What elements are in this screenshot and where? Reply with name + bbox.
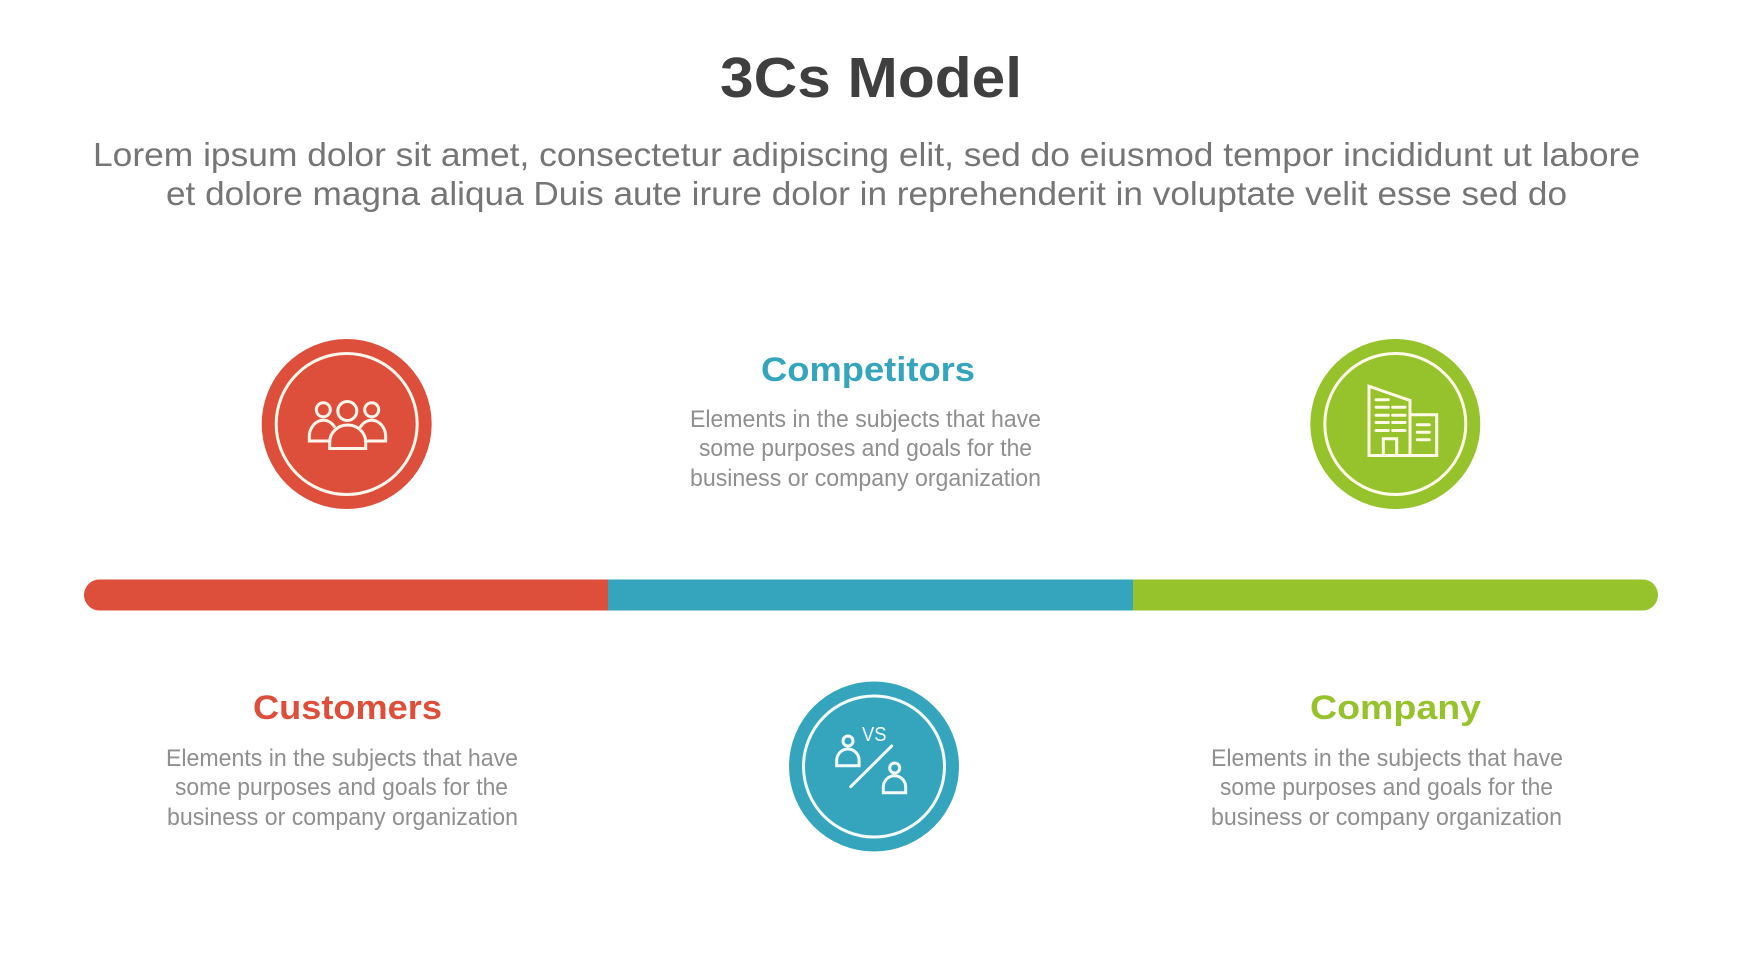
company text block: Elements in the subjects that have — [1211, 745, 1563, 772]
company text block — [1211, 689, 1563, 831]
customers text block: Customers — [253, 689, 442, 727]
icon: versus people in blue circle — [789, 682, 959, 852]
subtitle text block: Lorem ipsum dolor sit amet, consectetur adipiscing elit, sed do eiusmod tempor incididunt ut labore — [93, 136, 1640, 173]
competitors text block: Competitors — [761, 351, 975, 389]
title: 3Cs Model — [720, 46, 1022, 110]
customers text block: Elements in the subjects that have — [166, 745, 518, 772]
company text block: Company — [1310, 689, 1481, 727]
customers text block: business or company organization — [167, 804, 518, 831]
competitors text block: Elements in the subjects that have — [690, 406, 1041, 433]
company text block: some purposes and goals for the — [1220, 774, 1553, 801]
segmented timeline bar — [84, 580, 1658, 610]
competitors text block — [690, 351, 1041, 492]
competitors text block: some purposes and goals for the — [699, 435, 1032, 462]
competitors text block: business or company organization — [690, 465, 1041, 492]
icon: versus people in blue circle: VS — [862, 724, 886, 746]
company text block: business or company organization — [1211, 804, 1562, 831]
customers text block: some purposes and goals for the — [175, 774, 508, 801]
subtitle text block — [93, 136, 1640, 212]
icon: company building in green circle — [1310, 339, 1480, 509]
subtitle text block: et dolore magna aliqua Duis aute irure dolor in reprehenderit in voluptate velit esse sed do — [166, 175, 1567, 212]
customers text block — [166, 689, 518, 831]
icon: customers group in red circle — [262, 339, 432, 509]
